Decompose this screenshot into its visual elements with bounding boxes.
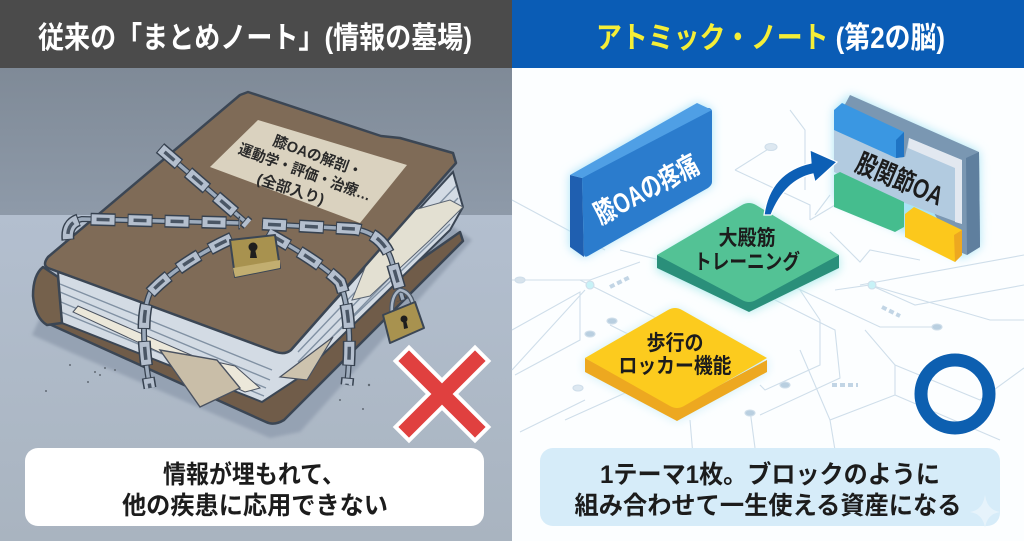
callout: atomic notes: 組み合わせて一生使える資産になる <box>574 492 962 520</box>
dust specks <box>45 364 370 410</box>
block: gluteus training: トレーニング <box>694 250 800 274</box>
callout: traditional notes: 他の疾患に応用できない <box>122 492 388 520</box>
block: knee OA pain: 膝OAの疼痛 <box>589 149 704 230</box>
circuit background <box>512 110 1024 480</box>
book pages <box>58 172 463 407</box>
cover label: 運動学・評価・治療… <box>236 140 374 205</box>
padlock: center <box>230 235 280 277</box>
header: atomic notes <box>512 0 1024 68</box>
header: traditional notes: 従来の「まとめノート」(情報の墓場) <box>38 22 472 55</box>
piece: blue <box>834 103 904 158</box>
block: gait rocker function: 歩行の <box>646 332 704 355</box>
cover label: 膝OAの解剖・ <box>270 132 365 181</box>
icon: blue circle <box>921 360 989 428</box>
callout: traditional notes <box>25 448 484 526</box>
panel: atomic notes <box>512 0 1024 541</box>
callout: atomic notes: 1テーマ1枚。ブロックのように <box>600 460 940 489</box>
block: gait rocker function: ロッカー機能 <box>618 355 732 378</box>
block: gait rocker function <box>585 307 767 421</box>
block: gluteus training: 大殿筋 <box>718 227 776 250</box>
callout: atomic notes <box>540 448 1000 528</box>
padlock: right <box>383 290 424 343</box>
icon: red cross <box>409 361 475 427</box>
cover label: (全部入り) <box>254 170 327 209</box>
book spine <box>33 267 62 325</box>
chains <box>68 148 403 388</box>
block: gluteus training <box>657 202 839 312</box>
book back cover <box>47 232 463 424</box>
arrow: knowledge transfer <box>764 150 837 215</box>
callout: traditional notes: 情報が埋もれて、 <box>163 460 345 489</box>
header: traditional notes <box>0 0 512 68</box>
block: knee OA pain <box>570 103 712 257</box>
cover label <box>210 120 407 223</box>
block: hip OA: 股関節OA <box>851 148 948 211</box>
piece: green <box>834 172 904 232</box>
panel: traditional notes <box>0 0 512 541</box>
block: hip OA <box>834 95 980 262</box>
header: atomic notes: アトミック・ノート (第2の脳) <box>596 22 945 55</box>
book cover <box>45 92 456 353</box>
piece: yellow <box>905 207 962 262</box>
illustration: chained book <box>32 92 472 438</box>
